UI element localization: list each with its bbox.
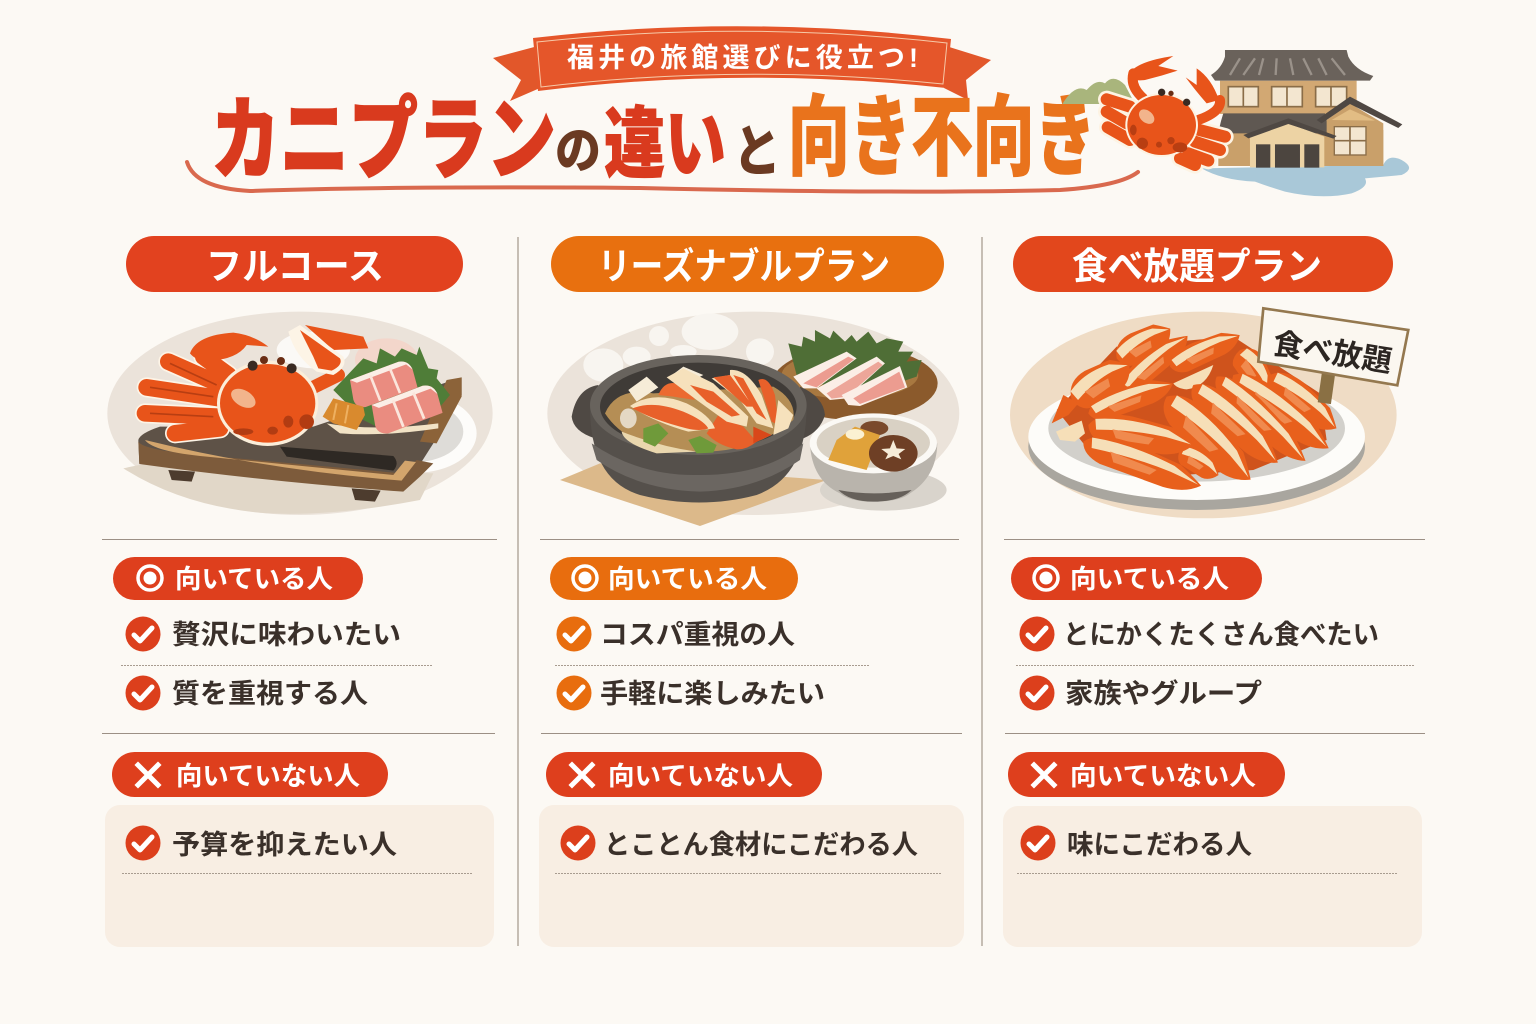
list item <box>126 676 368 710</box>
heading <box>1013 236 1393 292</box>
banner ribbon <box>493 26 991 101</box>
water <box>1202 158 1409 196</box>
divider <box>1004 540 1425 734</box>
pill: 向いている人: 向いている人 <box>1070 564 1229 594</box>
pill: 向いている人 <box>550 557 798 600</box>
title text: カニプラン <box>211 91 556 191</box>
list item: 家族やグループ <box>1065 678 1262 709</box>
pill: 向いていない人 <box>1008 752 1285 797</box>
list item <box>556 676 825 710</box>
title underline <box>187 162 1138 192</box>
pill: 向いていない人: 向いていない人 <box>1070 761 1256 791</box>
pill: 向いている人: 向いている人 <box>175 564 333 594</box>
title text: と <box>733 120 781 183</box>
box: not suited <box>1003 806 1422 947</box>
list item: とにかくたくさん食べたい <box>1063 620 1379 650</box>
pill: 向いていない人: 向いていない人 <box>176 761 360 791</box>
heading <box>551 236 944 292</box>
ryokan <box>1211 50 1402 168</box>
divider <box>540 540 962 734</box>
pill: 向いていない人 <box>546 752 822 797</box>
list item <box>126 616 401 652</box>
box: not suited <box>539 805 964 947</box>
list item: 贅沢に味わいたい <box>172 620 401 650</box>
list item: 手軽に楽しみたい <box>600 679 825 709</box>
pill: 向いていない人 <box>112 752 388 797</box>
heading: フルコース <box>206 246 384 287</box>
list item <box>556 616 795 652</box>
panel: フルコース <box>102 236 497 947</box>
banner ribbon: 福井の旅館選びに役立つ! <box>567 43 918 73</box>
box: not suited <box>105 805 494 947</box>
panel: 食べ放題プラン <box>1003 236 1425 947</box>
column dividers <box>518 237 982 946</box>
title text: 向き不向き <box>788 88 1096 187</box>
title area <box>187 26 1138 192</box>
pill: 向いている人: 向いている人 <box>608 564 767 594</box>
heading <box>126 236 463 292</box>
list item: 質を重視する人 <box>172 679 368 709</box>
title text <box>211 88 1096 191</box>
box: not suited: 予算を抑えたい人 <box>172 830 397 860</box>
box: not suited: 味にこだわる人 <box>1067 830 1252 860</box>
panel: リーズナブルプラン <box>539 236 964 947</box>
illustration: crab leg platter: 食べ放題 <box>1271 328 1394 379</box>
illustration: hot pot <box>547 312 959 526</box>
illustration: crab on wooden tray <box>107 312 493 515</box>
ryokan and crab illustration <box>1062 50 1409 196</box>
heading: リーズナブルプラン <box>598 245 890 287</box>
list item <box>1020 676 1262 710</box>
illustration: crab leg platter <box>1010 308 1408 518</box>
crab <box>1107 56 1225 165</box>
heading: 食べ放題プラン <box>1072 246 1322 287</box>
list item: コスパ重視の人 <box>600 620 795 650</box>
hill <box>1062 79 1135 104</box>
title text: の <box>555 123 601 179</box>
pill: 向いていない人: 向いていない人 <box>608 761 793 791</box>
pill: 向いている人 <box>113 557 363 600</box>
pill: 向いている人 <box>1011 557 1262 600</box>
title text: 違い <box>604 100 726 188</box>
box: not suited: とことん食材にこだわる人 <box>604 830 918 860</box>
divider <box>102 540 497 734</box>
